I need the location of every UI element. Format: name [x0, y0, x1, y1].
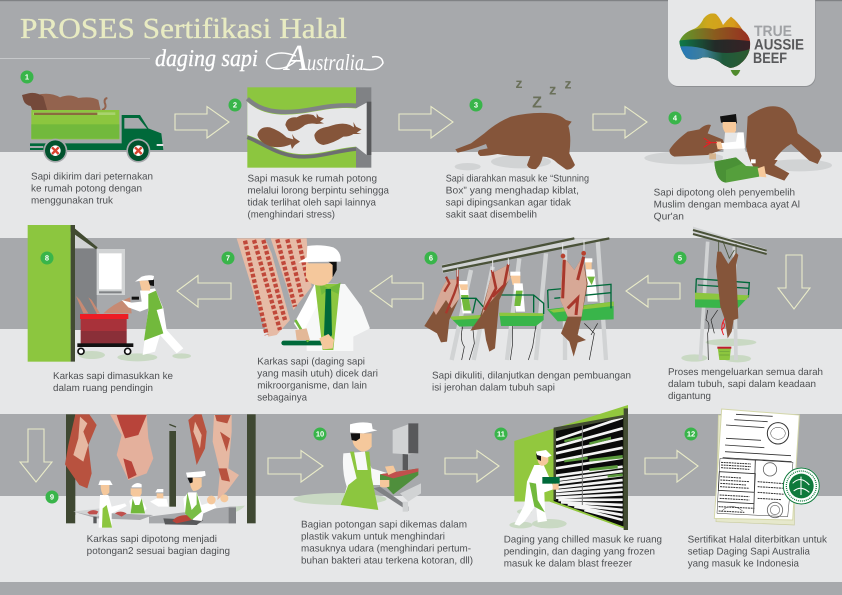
step 3: stunned cow with Z letters: [455, 75, 575, 170]
text: step 12: yang masuk ke Indonesia: [688, 559, 800, 570]
text: step 4: Sapi dipotong oleh penyembelih: [654, 188, 795, 199]
text: step 1: menggunakan truk: [31, 196, 113, 206]
step 12: halal certificate with MUI seal: [714, 409, 820, 525]
number badges: 2: [233, 101, 237, 110]
text: step 2: Sapi masuk ke rumah potong: [248, 174, 377, 185]
number badges: 1: [25, 73, 29, 82]
step 3: stunned cow with Z letters: Z: [532, 93, 542, 111]
text: step 2: melalui lorong berpintu sehingga: [248, 186, 390, 197]
text: step 7: sebagainya: [257, 392, 308, 404]
title: PROSES Sertifikasi Halal: [20, 13, 347, 45]
number badges: 5: [678, 254, 682, 263]
text: step 12: [688, 535, 827, 570]
text: step 4: [654, 188, 800, 223]
number badges: 11: [497, 430, 505, 439]
text: step 4: Muslim dengan membaca ayat Al: [654, 200, 800, 211]
icon: Australia map: [678, 10, 753, 76]
step 4: Muslim slaughterman with cow: [644, 106, 832, 183]
text: step 12: setiap Daging Sapi Australia: [688, 547, 811, 558]
step 3: stunned cow with Z letters: z: [515, 75, 522, 91]
text: step 9: Karkas sapi dipotong menjadi: [87, 534, 217, 545]
text: step 7: Karkas sapi (daging sapi: [257, 356, 365, 368]
logo card: [668, 0, 816, 87]
step 11: worker at blast freezer: [509, 405, 628, 530]
step 7: inspector with rib carcasses: [237, 238, 370, 351]
logo wordmark: TRUE: [754, 23, 792, 40]
step 6: skinning line with three workers: [424, 238, 614, 360]
text: step 4: Qur'an: [654, 212, 684, 223]
text: step 1: ke rumah potong dengan: [31, 184, 142, 194]
logo wordmark: AUSSIE: [754, 36, 804, 54]
text: step 8: dalam ruang pendingin: [53, 383, 153, 394]
logo wordmark: [753, 23, 804, 67]
text: step 10: [301, 520, 473, 567]
text: step 6: Sapi dikuliti, dilanjutkan dengan pembuangan: [432, 371, 631, 382]
text: step 9: potongan2 sesuai bagian daging: [87, 546, 230, 557]
logo wordmark: BEEF: [753, 50, 787, 67]
subtitle: ustralia: [307, 50, 364, 75]
text: step 10: plastik vakum untuk menghindari: [301, 532, 445, 543]
step 1: truck with cattle: [22, 93, 163, 163]
arrows: [20, 106, 810, 482]
text: step 10: masuknya udara (menghindari pertum-: [301, 544, 471, 555]
text: step 7: yang masih utuh) dicek dari: [257, 368, 378, 380]
text: step 5: [668, 367, 823, 402]
text: step 3: Sapi diarahkan masuk ke “Stunning: [446, 174, 589, 185]
step 9: cutting room: [65, 414, 256, 528]
number badges: 12: [687, 430, 695, 439]
step 3: stunned cow with Z letters: z: [549, 82, 556, 98]
text: step 10: Bagian potongan sapi dikemas dalam: [301, 520, 467, 531]
text: step 6: [432, 371, 631, 394]
text: step 5: dalam tubuh, sapi dalam keadaan: [668, 379, 816, 390]
step 10: packing worker at scale: [293, 422, 421, 512]
subtitle: A: [282, 38, 308, 79]
text: step 12: Sertifikat Halal diterbitkan untuk: [688, 535, 827, 546]
number badges: 3: [474, 101, 478, 110]
number badges: 8: [45, 254, 49, 263]
text: step 5: digantung: [668, 391, 711, 402]
number badges: 10: [316, 430, 324, 439]
text: step 10: buhan bakteri atau terkena kotoran, dll): [301, 556, 473, 567]
text: step 3: Box” yang menghadap kiblat,: [446, 186, 579, 197]
text: step 11: Daging yang chilled masuk ke ruang: [504, 535, 662, 546]
text: step 5: Proses mengeluarkan semua darah: [668, 367, 823, 378]
text: step 1: Sapi dikirim dari peternakan: [31, 172, 153, 182]
text: step 3: [446, 174, 589, 221]
subtitle: [0, 38, 383, 79]
text: step 11: [504, 535, 662, 570]
text: step 6: isi jerohan dalam tubuh sapi: [432, 383, 555, 394]
number badges: 6: [429, 254, 433, 263]
number badges: [20, 70, 698, 504]
text: step 2: (menghindari stress): [248, 210, 335, 221]
step 3: stunned cow with Z letters: z: [564, 76, 571, 91]
text: step 7: mikroorganisme, dan lain: [257, 380, 367, 392]
text: step 3: sapi dipingsankan agar tidak: [446, 198, 571, 209]
step 2: race corridor with cattle: [247, 87, 371, 168]
subtitle: daging sapi: [155, 46, 258, 72]
number badges: 9: [50, 493, 54, 502]
number badges: 4: [673, 114, 678, 123]
text: step 11: masuk ke dalam blast freezer: [504, 559, 633, 570]
step 8: worker pushing cart into chiller: [28, 225, 191, 362]
text: step 2: [248, 174, 390, 221]
text: step 9: [87, 534, 230, 557]
text: step 3: sakit saat disembelih: [446, 210, 537, 221]
text: step 8: [53, 371, 174, 394]
step 5: hanging carcass bleeding: [681, 227, 767, 362]
text: step 7: [257, 356, 378, 404]
number badges: 7: [226, 254, 230, 263]
text: step 8: Karkas sapi dimasukkan ke: [53, 371, 174, 382]
text: step 2: tidak terlihat oleh sapi lainnya: [248, 198, 377, 209]
text: step 11: pendingin, dan daging yang frozen: [504, 547, 655, 558]
text: step 1: [31, 172, 153, 206]
